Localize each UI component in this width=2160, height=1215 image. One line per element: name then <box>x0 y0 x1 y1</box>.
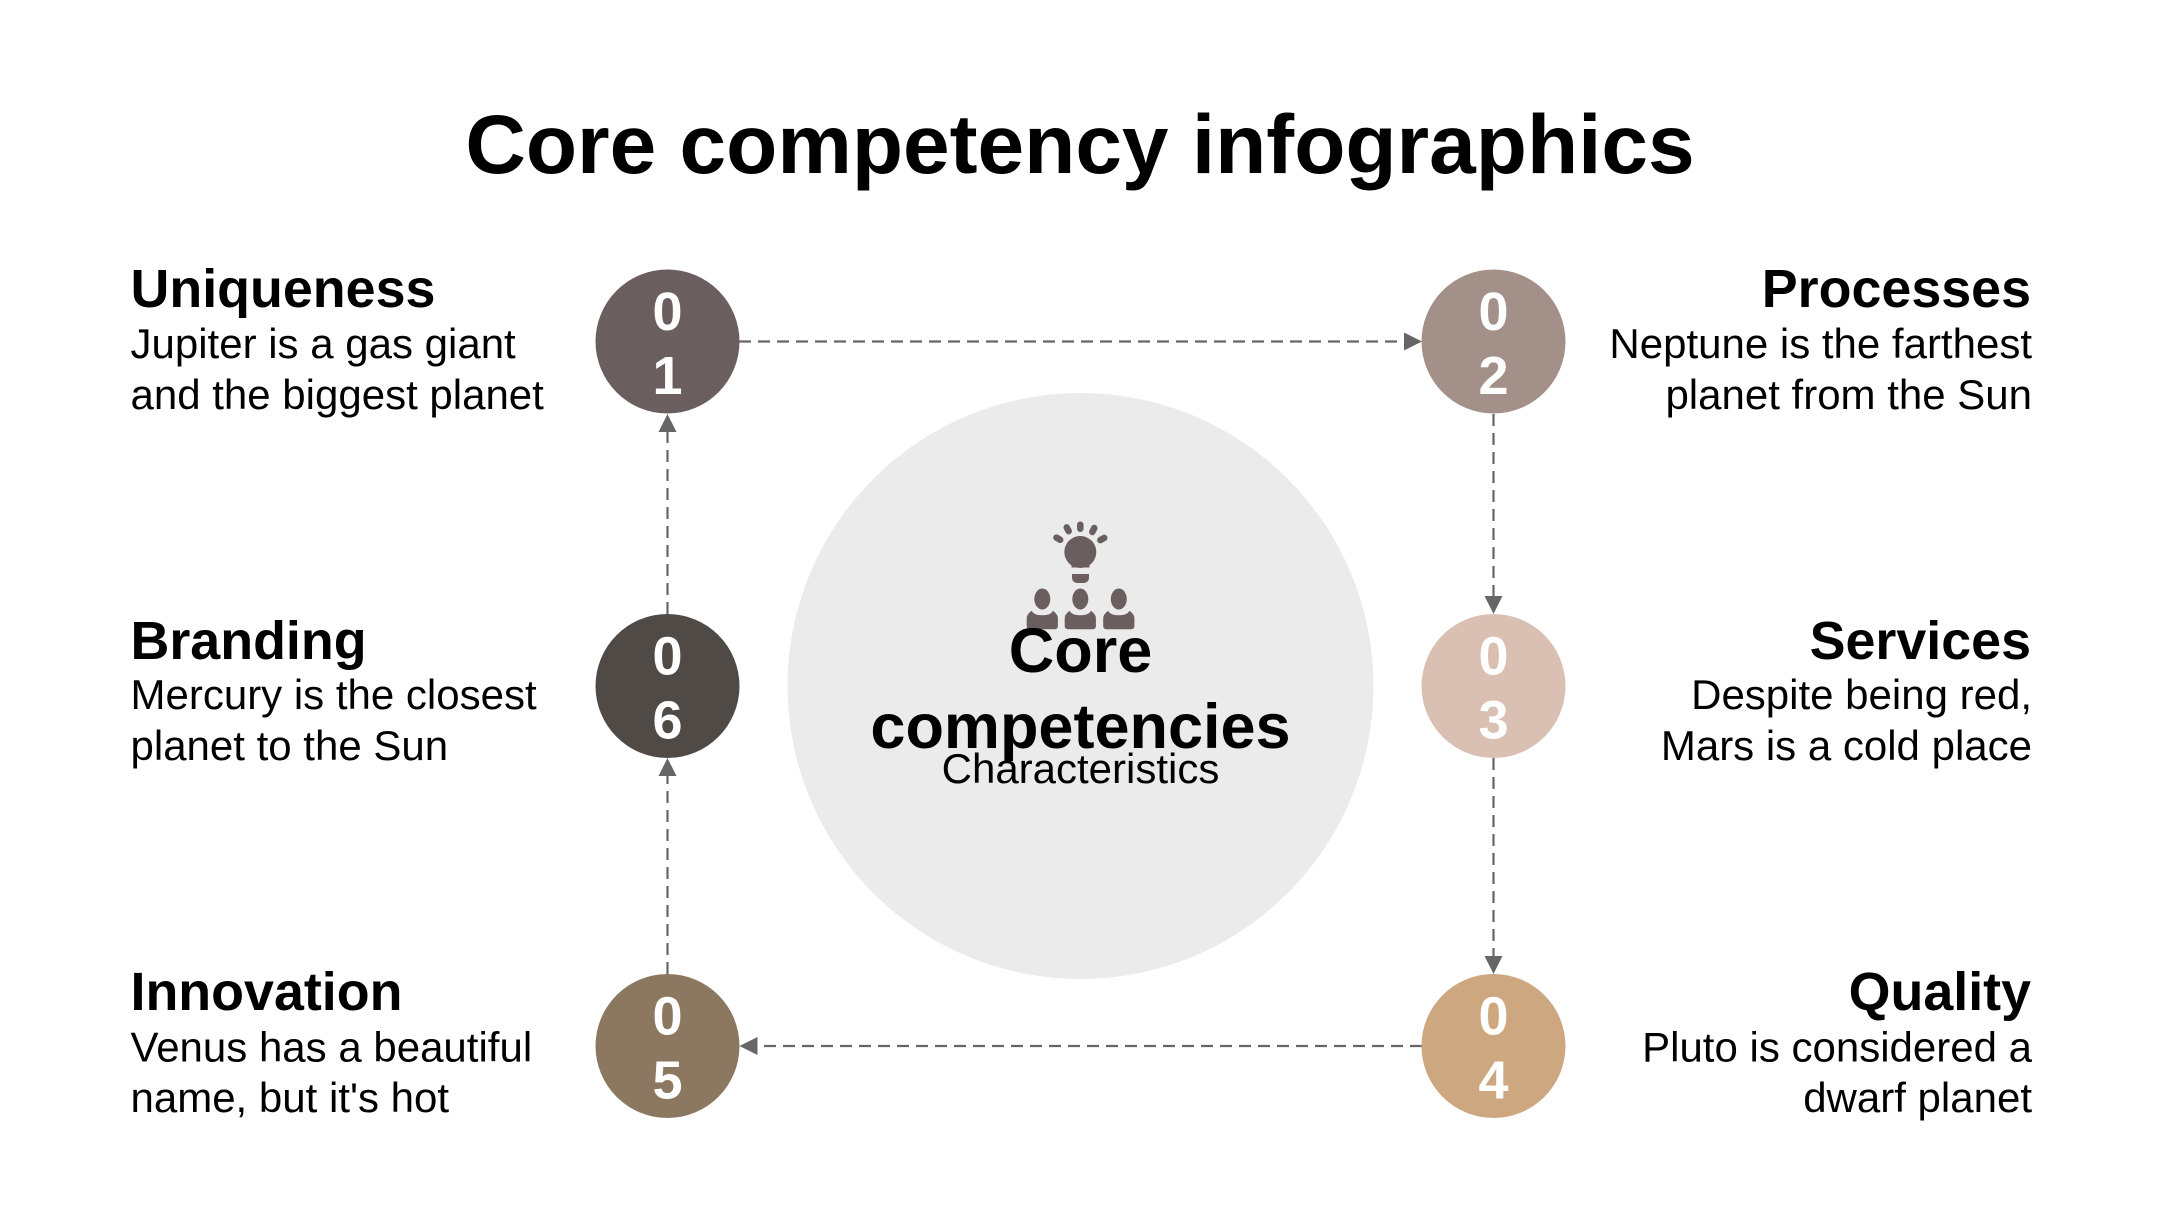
node 01: 1 <box>652 346 683 406</box>
text block: Services: Despite being red, <box>1691 671 2032 718</box>
node 03: 0 <box>1478 626 1509 686</box>
node 05: 5 <box>652 1050 683 1110</box>
node 03: 3 <box>1478 690 1509 750</box>
text block: Uniqueness <box>130 259 544 418</box>
central text: core competencies characteristics <box>870 616 1291 792</box>
node 04 <box>1422 974 1566 1118</box>
text block: Services: Services <box>1810 611 2031 671</box>
arrow: 06 to 01 <box>658 414 676 614</box>
node 01 <box>596 270 740 414</box>
text block: Uniqueness: Uniqueness <box>130 259 435 319</box>
node 06 <box>596 614 740 758</box>
text block: Branding: Mercury is the closest <box>130 671 537 718</box>
node 06: 0 <box>652 626 683 686</box>
arrow: 05 to 06 <box>658 758 676 974</box>
node 05: 0 <box>652 986 683 1046</box>
node 06: 6 <box>652 690 683 750</box>
text block: Quality: Pluto is considered a <box>1642 1024 2033 1070</box>
text block: Processes: Neptune is the farthest <box>1609 320 2032 367</box>
arrow: 04 to 05 <box>740 1037 1422 1055</box>
node 04: 4 <box>1478 1050 1509 1110</box>
text block: Quality <box>1642 962 2033 1121</box>
text block: Innovation <box>130 962 532 1121</box>
node 02: 2 <box>1478 346 1509 406</box>
text block: Quality: dwarf planet <box>1803 1074 2032 1121</box>
node 05 <box>596 974 740 1118</box>
text block: Uniqueness: and the biggest planet <box>130 371 544 418</box>
text block: Services: Mars is a cold place <box>1661 722 2032 769</box>
text block: Innovation: Venus has a beautiful <box>130 1024 532 1070</box>
central circle <box>788 393 1374 979</box>
text block: Branding <box>130 611 537 769</box>
arrow: 02 to 03 <box>1484 414 1502 614</box>
text block: Quality: Quality <box>1849 962 2031 1022</box>
icon: light bulb above three people <box>1027 525 1134 629</box>
text block: Processes <box>1609 259 2032 418</box>
text block: Innovation: Innovation <box>130 962 402 1022</box>
node 02 <box>1422 270 1566 414</box>
arrow: 03 to 04 <box>1484 758 1502 974</box>
central text: core competencies characteristics: Core <box>1009 616 1152 686</box>
node 01: 0 <box>652 282 683 342</box>
text block: Processes: Processes <box>1762 259 2031 319</box>
text block: Innovation: name, but it's hot <box>130 1074 449 1121</box>
title: Core competency infographics <box>465 97 1695 191</box>
text block: Services <box>1661 611 2032 769</box>
text block: Processes: planet from the Sun <box>1665 371 2032 418</box>
text block: Branding: Branding <box>130 611 367 671</box>
central text: core competencies characteristics: competencies <box>870 692 1291 762</box>
central text: core competencies characteristics: Characteristics <box>942 745 1219 792</box>
arrow: 01 to 02 <box>739 332 1422 350</box>
text block: Branding: planet to the Sun <box>130 722 448 769</box>
node 02: 0 <box>1478 282 1509 342</box>
text block: Uniqueness: Jupiter is a gas giant <box>130 320 516 367</box>
node 03 <box>1422 614 1566 758</box>
node 04: 0 <box>1478 986 1509 1046</box>
